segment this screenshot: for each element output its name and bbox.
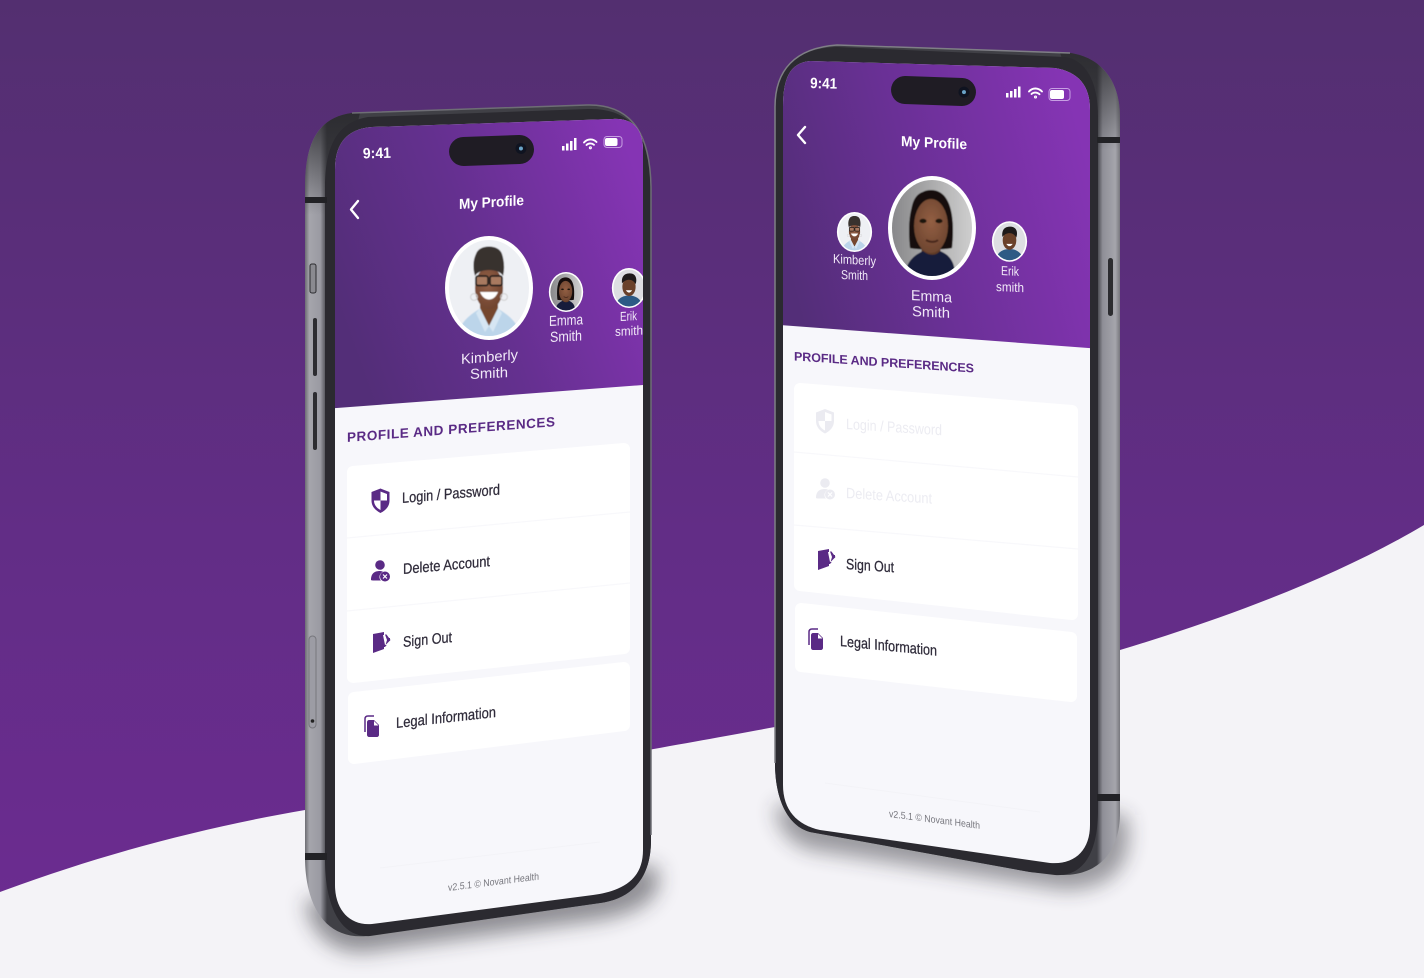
signal icon — [1006, 86, 1020, 98]
left phone dark bezel — [325, 109, 651, 936]
avatar: Erik — [612, 268, 646, 308]
shadow under left phone — [305, 865, 659, 952]
legal card — [801, 609, 1071, 696]
purple profile header — [330, 110, 650, 408]
avatar: Kimberly — [837, 212, 872, 252]
left phone frame details — [305, 105, 651, 860]
left phone top corner shading — [305, 113, 360, 215]
heading: My Profile: My Profile — [459, 193, 524, 213]
row: Legal Information: Legal Information — [396, 704, 496, 732]
name: Kimberly Smith: Kimberly — [461, 347, 519, 368]
name: Emma Smith: Emma — [549, 312, 584, 330]
section heading: PROFILE AND PREFERENCES — [347, 414, 555, 445]
row: Login / Password: Login / Password — [402, 482, 500, 507]
left phone metal frame — [305, 105, 651, 936]
row: Delete Account — [371, 556, 490, 582]
name: Emma Smith — [911, 288, 953, 322]
avatar: Emma — [549, 272, 583, 312]
phone: Emma profile view — [775, 45, 1128, 890]
right phone dark bezel — [775, 47, 1098, 875]
row: Legal Information — [809, 629, 937, 660]
name: Erik smith: Erik — [1001, 263, 1019, 279]
back chevron — [798, 127, 805, 143]
right phone metal frame — [775, 45, 1120, 875]
left phone screen — [330, 110, 650, 940]
dynamic island — [449, 135, 534, 166]
name: Kimberly Smith: Kimberly — [833, 251, 876, 269]
row: Sign Out — [818, 549, 895, 576]
name: Kimberly Smith — [834, 254, 876, 280]
battery icon — [1049, 88, 1070, 100]
section heading: PROFILE AND PREFERENCES — [794, 350, 974, 376]
name: Emma Smith: Emma — [911, 288, 953, 307]
signal icon — [562, 138, 576, 150]
row: Login / Password — [372, 482, 500, 513]
status bar — [363, 135, 622, 166]
purple profile header — [780, 55, 1095, 348]
row: Sign Out: Sign Out — [846, 556, 895, 576]
row: Sign Out — [373, 632, 452, 653]
row: Login / Password (faded) — [816, 409, 942, 439]
row: Login / Password (faded): Login / Password — [846, 416, 942, 439]
name: Emma Smith: Smith — [912, 304, 950, 322]
settings card — [794, 389, 1078, 614]
right phone frame details — [775, 45, 1120, 801]
phone: Kimberly profile view — [305, 105, 659, 952]
name: Erik smith: smith — [615, 323, 643, 339]
name: Erik smith: smith — [996, 279, 1024, 295]
name: Erik smith — [615, 310, 642, 336]
time: 9:41 — [363, 145, 391, 162]
shadow under right phone — [775, 805, 1128, 890]
status bar — [810, 75, 1070, 106]
name: Erik smith — [996, 263, 1024, 295]
name: Emma Smith — [550, 316, 584, 342]
heading: My Profile: My Profile — [901, 134, 967, 153]
name: Kimberly Smith: Smith — [841, 267, 868, 283]
row: Delete Account: Delete Account — [403, 553, 491, 578]
avatar: Erik — [992, 221, 1027, 262]
version footer: v2.5.1 © Novant Health — [889, 809, 980, 832]
background: light wave — [0, 525, 1424, 978]
screen background — [330, 110, 650, 940]
legal card — [364, 708, 496, 737]
version footer: v2.5.1 © Novant Health — [448, 872, 539, 894]
back chevron — [351, 201, 358, 218]
name: Erik smith: Erik — [620, 308, 637, 324]
settings card — [371, 484, 500, 653]
wifi icon — [584, 139, 596, 148]
dynamic island — [891, 76, 976, 106]
screen background — [780, 55, 1095, 870]
row: Sign Out: Sign Out — [403, 629, 453, 651]
row: Legal Information: Legal Information — [840, 633, 937, 660]
name: Kimberly Smith: Smith — [470, 365, 508, 383]
right phone screen — [780, 55, 1095, 870]
row: Legal Information — [364, 708, 496, 737]
wifi icon — [1029, 88, 1042, 98]
right phone top corner shading — [1060, 53, 1120, 150]
battery icon — [604, 136, 622, 148]
name: Emma Smith: Smith — [550, 328, 582, 346]
time: 9:41 — [810, 75, 837, 93]
avatar: Emma — [888, 176, 976, 280]
avatar: Kimberly — [445, 236, 533, 340]
row: Delete Account (faded) — [816, 478, 933, 508]
name: Kimberly Smith — [462, 350, 518, 379]
row: Delete Account (faded): Delete Account — [846, 485, 933, 508]
